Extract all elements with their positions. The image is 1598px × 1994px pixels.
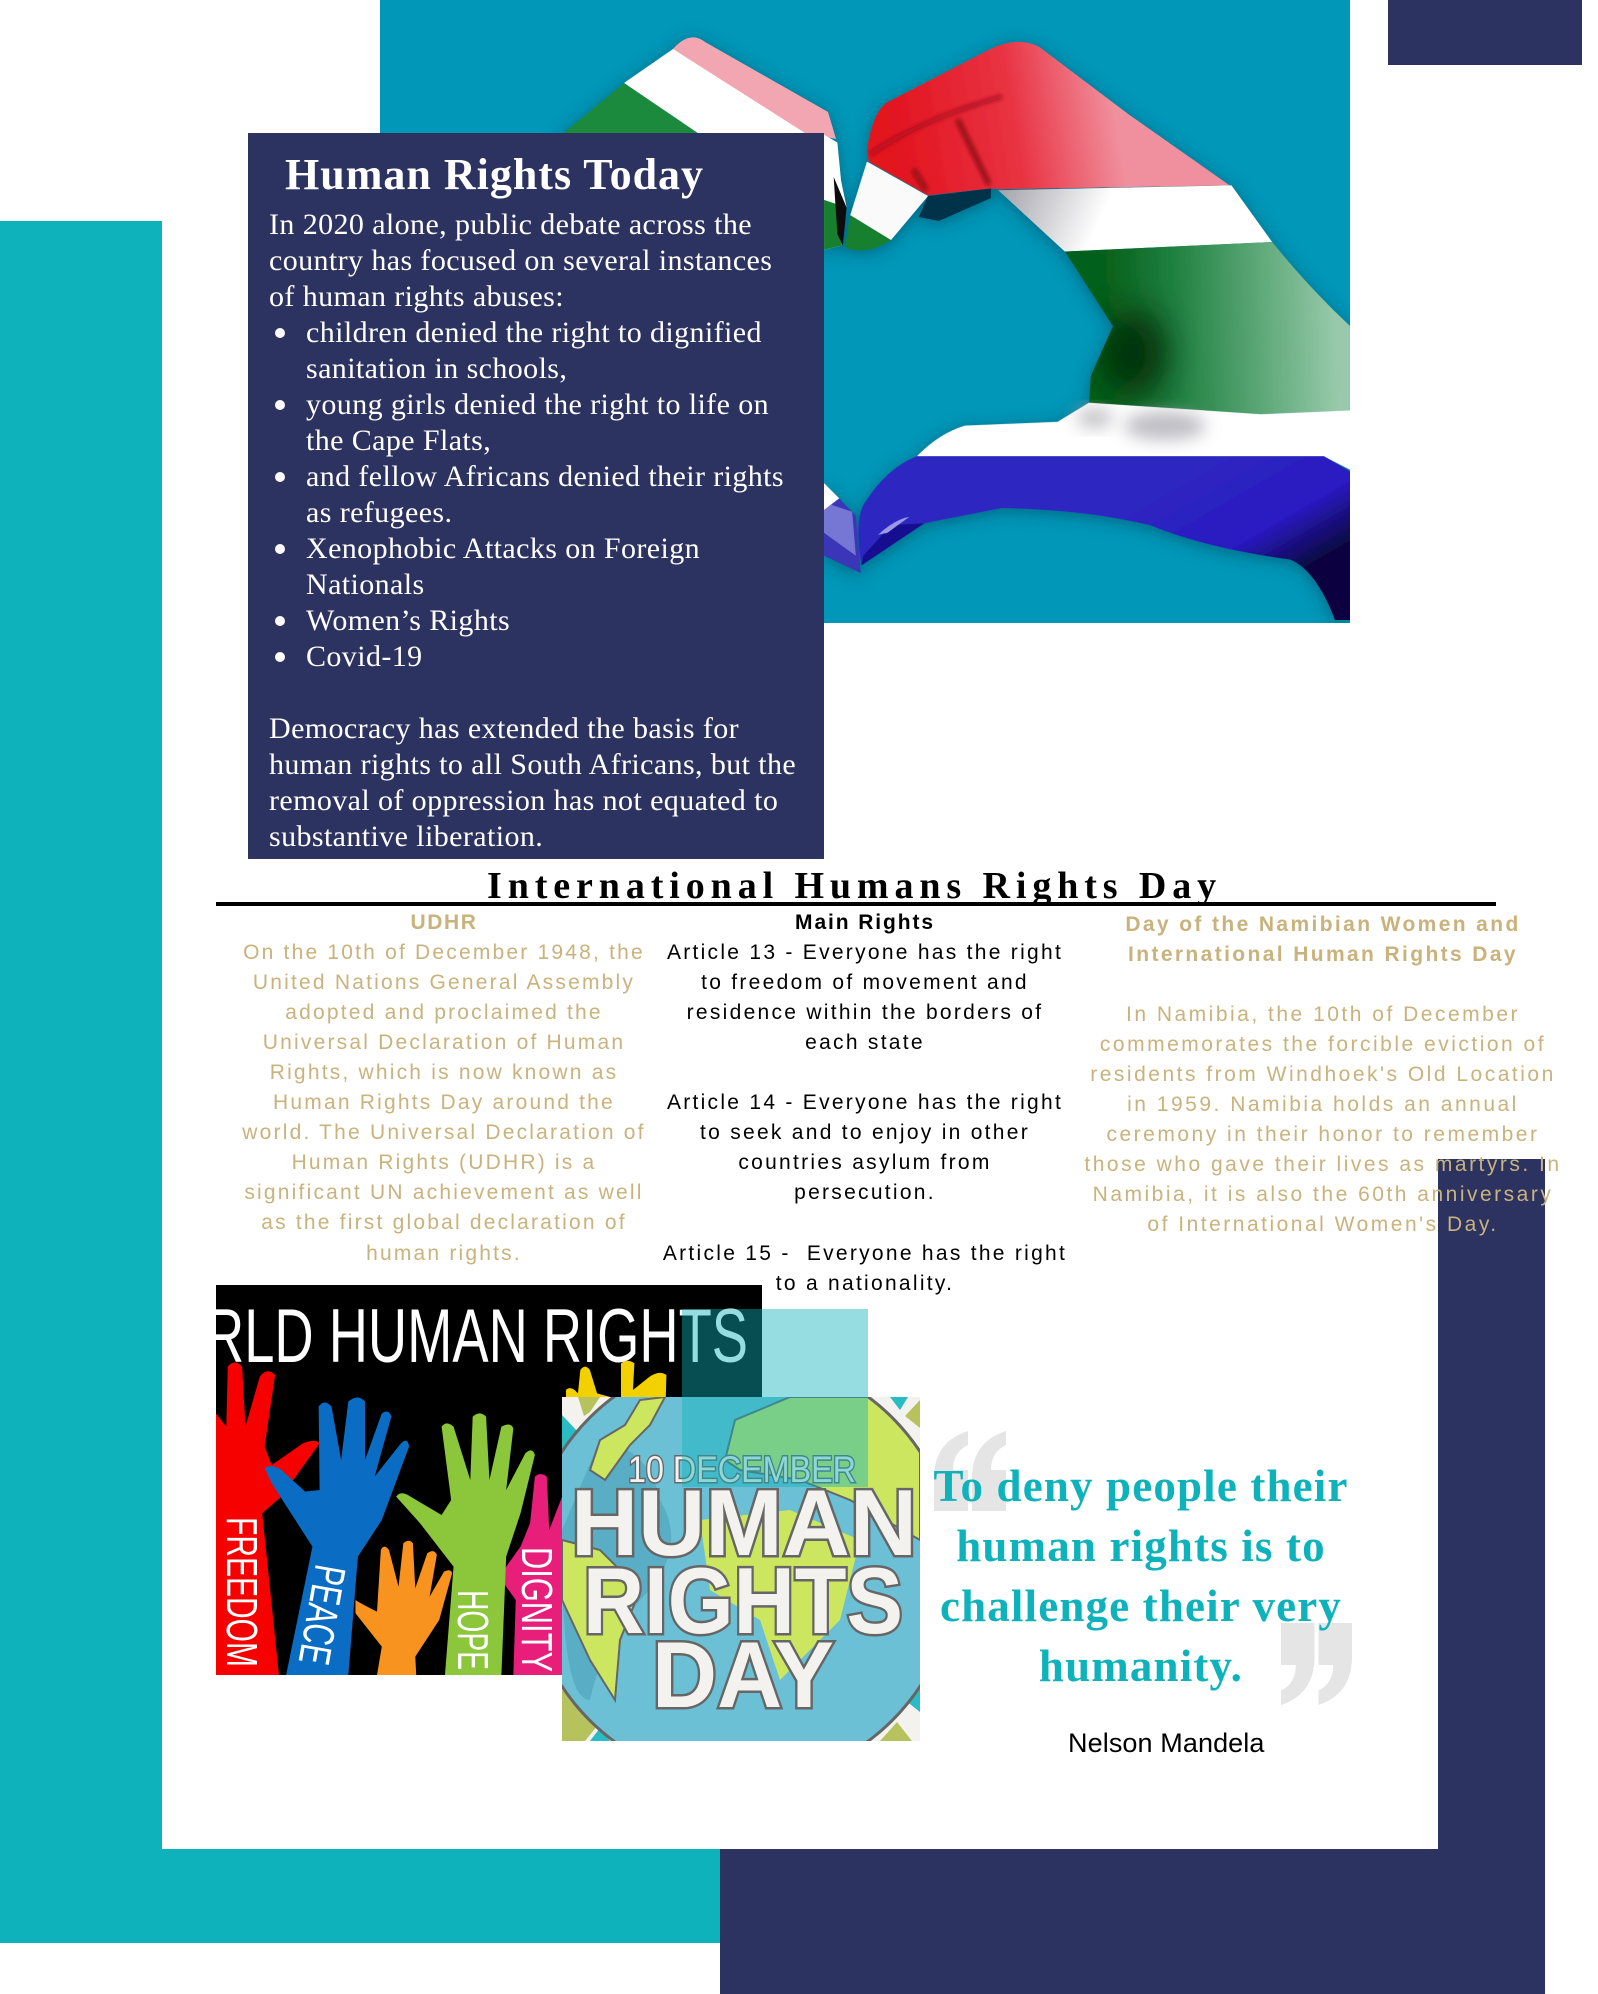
text column: Day of the Namibian Women: International Human Rights Day xyxy=(1128,943,1518,966)
text column: Main Rights xyxy=(663,911,1067,1295)
navy corner block: top right xyxy=(1388,0,1582,65)
text column: Day of the Namibian Women: In Namibia, the 10th of December xyxy=(1126,1003,1520,1026)
teal background band: left xyxy=(0,221,162,1943)
panel body text: Women’s Rights xyxy=(306,604,510,637)
text column: UDHR: Human Rights Day around the xyxy=(273,1091,615,1114)
panel body text: removal of oppression has not equated to xyxy=(269,784,778,817)
panel body text: In 2020 alone, public debate across the xyxy=(269,208,752,241)
globe lettering: 10 DECEMBER xyxy=(628,1449,856,1490)
left hand top fingers xyxy=(555,37,836,140)
text column: UDHR xyxy=(242,911,646,1265)
text column: UDHR: as the first global declaration of xyxy=(261,1211,627,1234)
panel heading: Human Rights Today xyxy=(285,150,704,199)
panel body text: as refugees. xyxy=(306,496,452,529)
navy background block: right xyxy=(1438,1159,1545,1859)
text column: Main Rights: each state xyxy=(805,1031,925,1054)
panel body text: Xenophobic Attacks on Foreign xyxy=(306,532,700,565)
panel body text: children denied the right to dignified xyxy=(306,316,762,349)
text column: UDHR: world. The Universal Declaration of xyxy=(242,1121,646,1144)
panel body text: and fellow Africans denied their rights xyxy=(306,460,784,493)
hand labels xyxy=(217,1517,561,1672)
globe xyxy=(562,1397,920,1741)
image: World Human Rights raised hands xyxy=(216,1285,762,1675)
text column: Day of the Namibian Women: in 1959. Namibia holds an annual xyxy=(1127,1093,1519,1116)
panel body text: Democracy has extended the basis for xyxy=(269,712,739,745)
quote text: challenge their very xyxy=(940,1581,1342,1631)
panel body text: Nationals xyxy=(306,568,425,601)
globe lettering: HUMAN xyxy=(571,1470,917,1575)
panel: Human Rights Today xyxy=(248,133,824,859)
text column: Day of the Namibian Women: residents from Windhoek's Old Location xyxy=(1090,1063,1556,1086)
text column: Day of the Namibian Women: Day of the Namibian Women and xyxy=(1125,913,1521,936)
text column: Day of the Namibian Women: commemorates the forcible eviction of xyxy=(1100,1033,1546,1056)
text column: UDHR: UDHR xyxy=(410,911,478,934)
text column: Day of the Namibian Women: ceremony in their honor to remember xyxy=(1106,1123,1539,1146)
text column: Main Rights: persecution. xyxy=(794,1181,936,1204)
quote text: To deny people their xyxy=(933,1461,1349,1511)
text column: UDHR: Rights, which is now known as xyxy=(270,1061,618,1084)
text column: Main Rights: to seek and to enjoy in other xyxy=(700,1121,1030,1144)
image: 10 December Human Rights Day globe xyxy=(562,1397,920,1741)
quote text: humanity. xyxy=(1039,1641,1243,1691)
text column: UDHR: Human Rights (UDHR) is a xyxy=(292,1151,596,1174)
teal background band: bottom xyxy=(0,1849,720,1943)
text column: Main Rights: countries asylum from xyxy=(738,1151,992,1174)
text column: UDHR: adopted and proclaimed the xyxy=(285,1001,603,1024)
corner diamonds xyxy=(562,1397,920,1741)
quote attribution: Nelson Mandela xyxy=(1068,1728,1265,1758)
text column: UDHR: human rights. xyxy=(366,1242,522,1265)
globe outline xyxy=(527,1355,955,1783)
section title: International Humans Rights Day: International Humans Rights Day xyxy=(487,865,1222,907)
icon: opening quotation mark xyxy=(934,1431,1006,1511)
text column: UDHR: Universal Declaration of Human xyxy=(263,1031,625,1054)
panel body text xyxy=(269,208,796,853)
quote text: human rights is to xyxy=(956,1521,1326,1571)
panel body text: Covid-19 xyxy=(306,640,423,673)
panel body text: the Cape Flats, xyxy=(306,424,491,457)
navy background block: bottom xyxy=(720,1849,1545,1994)
panel body text: human rights to all South Africans, but the xyxy=(269,748,796,781)
text column: Main Rights: Main Rights xyxy=(795,911,935,934)
text column: UDHR: United Nations General Assembly xyxy=(253,971,635,994)
icon: closing quotation mark xyxy=(1281,1623,1352,1705)
panel body text: substantive liberation. xyxy=(269,820,543,853)
text column: Main Rights: Article 13 - Everyone has the right xyxy=(667,941,1063,964)
text column: Main Rights: Article 14 - Everyone has the right xyxy=(667,1091,1063,1114)
text column: UDHR: On the 10th of December 1948, the xyxy=(243,941,645,964)
panel body text: young girls denied the right to life on xyxy=(306,388,769,421)
section title rule xyxy=(216,902,1496,906)
translucent teal square overlay xyxy=(682,1309,868,1487)
panel body text: of human rights abuses: xyxy=(269,280,564,313)
text column: Main Rights: to a nationality. xyxy=(776,1272,954,1295)
text column: Main Rights: Article 15 - Everyone has the right xyxy=(663,1242,1067,1265)
quote text xyxy=(933,1461,1349,1691)
text column: Day of the Namibian Women: those who gave their lives as martyrs. In xyxy=(1084,1153,1562,1176)
painted hands xyxy=(216,1361,666,1675)
hero image: heart hands painted with the South African flag xyxy=(380,0,1350,623)
text column: Day of the Namibian Women: of International Women's Day. xyxy=(1147,1213,1499,1236)
text column: Day of the Namibian Women xyxy=(1084,913,1562,1236)
panel body text: sanitation in schools, xyxy=(306,352,567,385)
text column: Day of the Namibian Women: Namibia, it is also the 60th anniversary xyxy=(1093,1183,1553,1206)
text column: Main Rights: to freedom of movement and xyxy=(701,971,1029,994)
text column: UDHR: significant UN achievement as well xyxy=(244,1181,644,1204)
text column: Main Rights: residence within the borders of xyxy=(687,1001,1043,1024)
globe lettering xyxy=(571,1449,917,1727)
globe lettering: DAY xyxy=(652,1622,834,1727)
panel body text: country has focused on several instances xyxy=(269,244,772,277)
